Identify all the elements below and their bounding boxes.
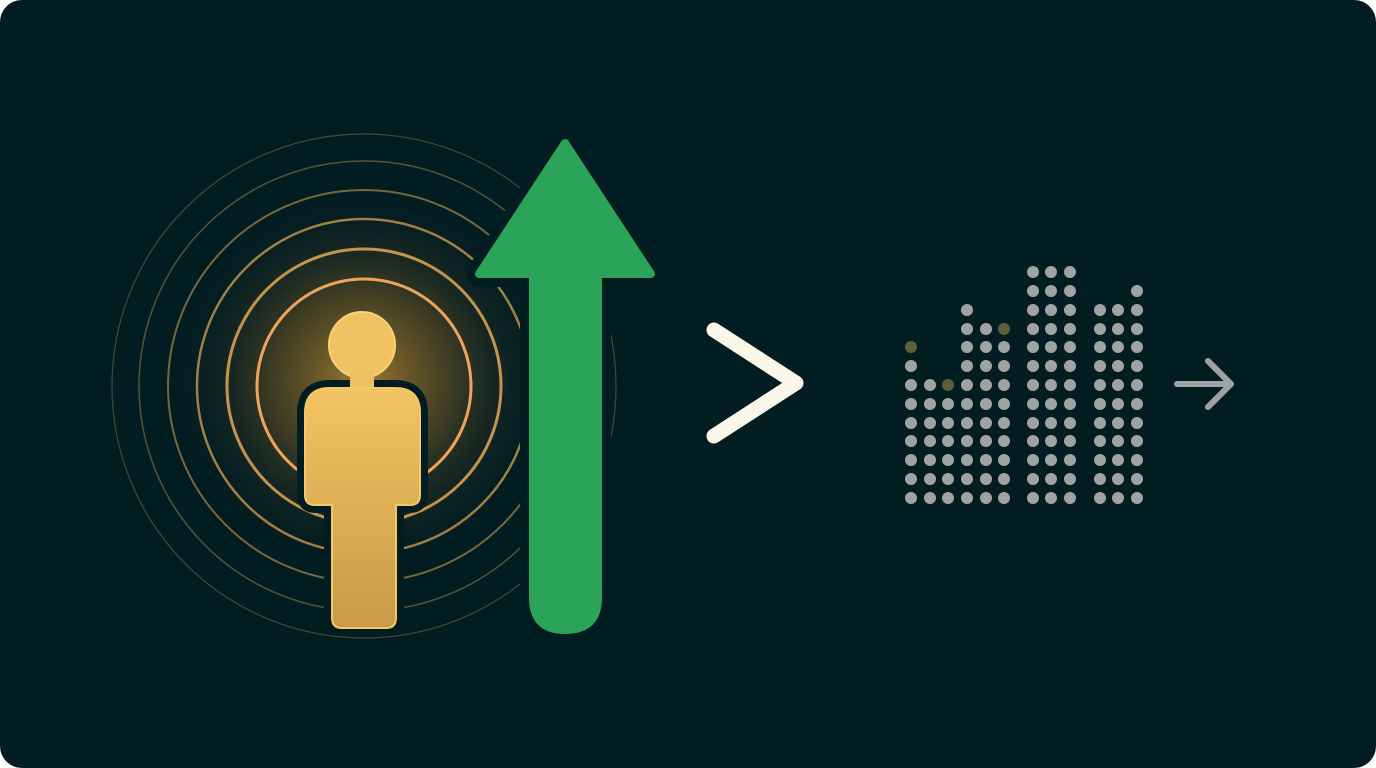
icon: green up arrow <box>479 143 651 630</box>
person figure <box>305 388 420 628</box>
icon: person with radiating rings <box>112 134 616 638</box>
greater-than symbol <box>714 330 796 436</box>
dot matrix bar chart <box>905 266 1143 504</box>
arrow: right <box>1177 361 1231 407</box>
